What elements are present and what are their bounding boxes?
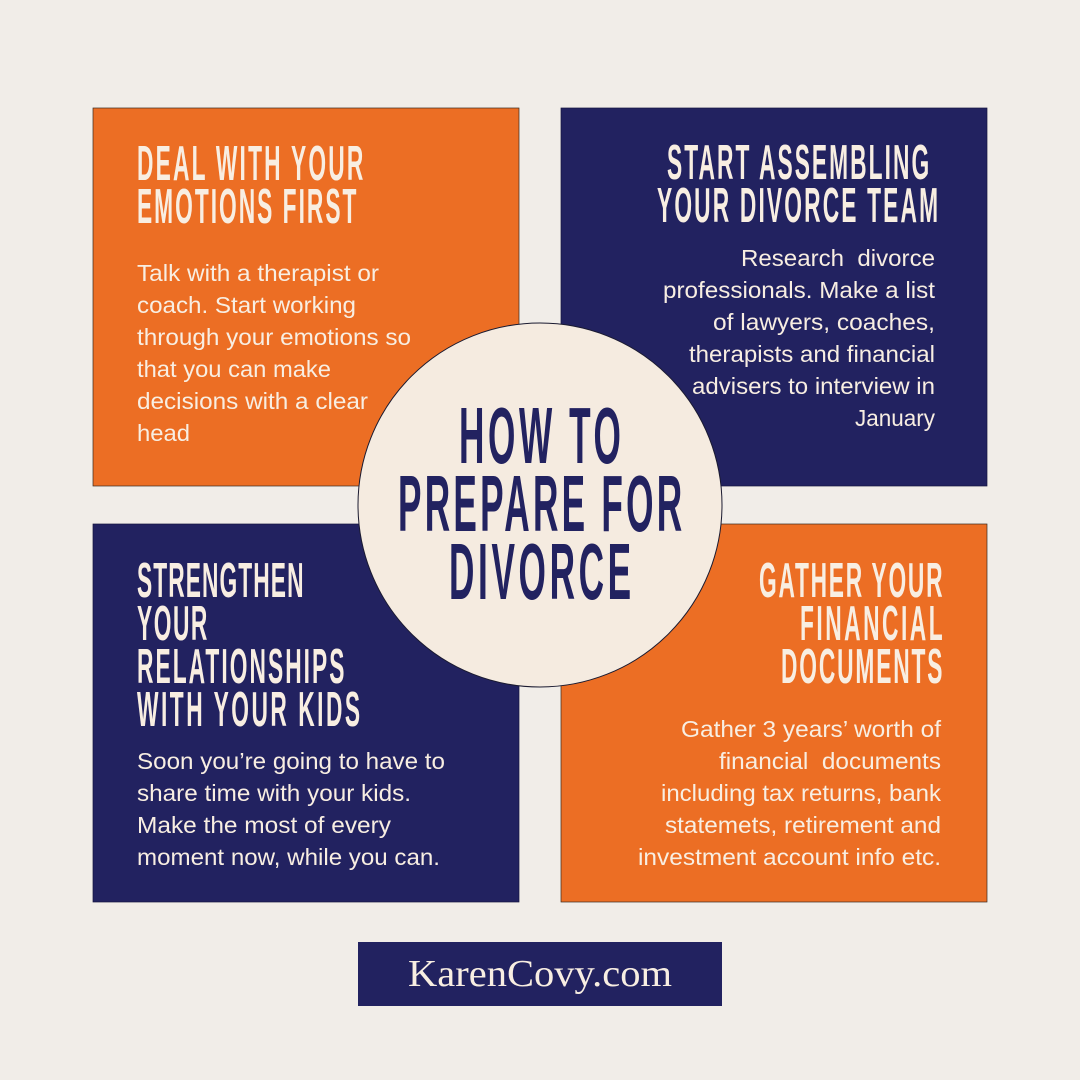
text: financial body: investment account info etc.: [638, 844, 941, 870]
heading: gather your financial documents: DOCUMENTS: [781, 639, 942, 695]
text: emotions body: head: [137, 420, 190, 446]
heading: gather your financial documents: GATHER YOUR: [759, 553, 943, 609]
center circle with title: [358, 323, 722, 687]
text: financial body: Gather 3 years’ worth of: [681, 716, 941, 742]
text: divorce team body: advisers to interview in: [692, 373, 935, 399]
heading: strengthen your relationships with your kids: STRENGTHEN: [137, 553, 304, 609]
text: financial body: financial documents: [719, 748, 941, 774]
heading: deal with your emotions first: [137, 136, 363, 235]
text: kids body: moment now, while you can.: [137, 844, 440, 870]
text: financial body: statemets, retirement and: [665, 812, 941, 838]
text: divorce team body: [663, 245, 935, 431]
text: emotions body: through your emotions so: [137, 324, 411, 350]
title: how to prepare for divorce: [398, 392, 682, 617]
title: how to prepare for divorce: HOW TO: [459, 392, 621, 481]
panel: divorce team: [561, 108, 987, 486]
text: kids body: [137, 748, 445, 870]
heading: start assembling your divorce team: START ASSEMBLING: [667, 135, 929, 191]
text: divorce team body: Research divorce: [741, 245, 935, 271]
text: divorce team body: of lawyers, coaches,: [713, 309, 935, 335]
heading: strengthen your relationships with your kids: WITH YOUR KIDS: [137, 682, 360, 738]
panel: financial documents: [561, 524, 987, 902]
footer: website badge: KarenCovy.com: [408, 953, 672, 995]
text: kids body: Soon you’re going to have to: [137, 748, 445, 774]
heading: strengthen your relationships with your kids: RELATIONSHIPS: [137, 639, 344, 695]
heading: start assembling your divorce team: YOUR DIVORCE TEAM: [657, 178, 938, 234]
text: kids body: Make the most of every: [137, 812, 391, 838]
text: emotions body: decisions with a clear: [137, 388, 368, 414]
heading: gather your financial documents: [759, 553, 943, 695]
text: emotions body: that you can make: [137, 356, 331, 382]
panel: deal with your emotions: [93, 108, 519, 486]
text: emotions body: Talk with a therapist or: [137, 260, 379, 286]
text: financial body: including tax returns, bank: [661, 780, 941, 806]
text: emotions body: [137, 260, 411, 446]
text: divorce team body: professionals. Make a list: [663, 277, 935, 303]
heading: strengthen your relationships with your kids: YOUR: [137, 596, 207, 652]
title: how to prepare for divorce: DIVORCE: [449, 528, 631, 617]
title: how to prepare for divorce: PREPARE FOR: [398, 460, 682, 549]
text: financial body: [638, 716, 941, 870]
heading: start assembling your divorce team: [657, 135, 938, 234]
panel: relationships with kids: [93, 524, 519, 902]
text: divorce team body: January: [855, 405, 935, 431]
footer: website badge: [358, 942, 722, 1006]
heading: deal with your emotions first: EMOTIONS FIRST: [137, 179, 357, 235]
heading: deal with your emotions first: DEAL WITH YOUR: [137, 136, 363, 192]
text: emotions body: coach. Start working: [137, 292, 356, 318]
text: kids body: share time with your kids.: [137, 780, 411, 806]
text: divorce team body: therapists and financial: [689, 341, 935, 367]
heading: strengthen your relationships with your kids: [137, 553, 360, 738]
heading: gather your financial documents: FINANCIAL: [800, 596, 943, 652]
